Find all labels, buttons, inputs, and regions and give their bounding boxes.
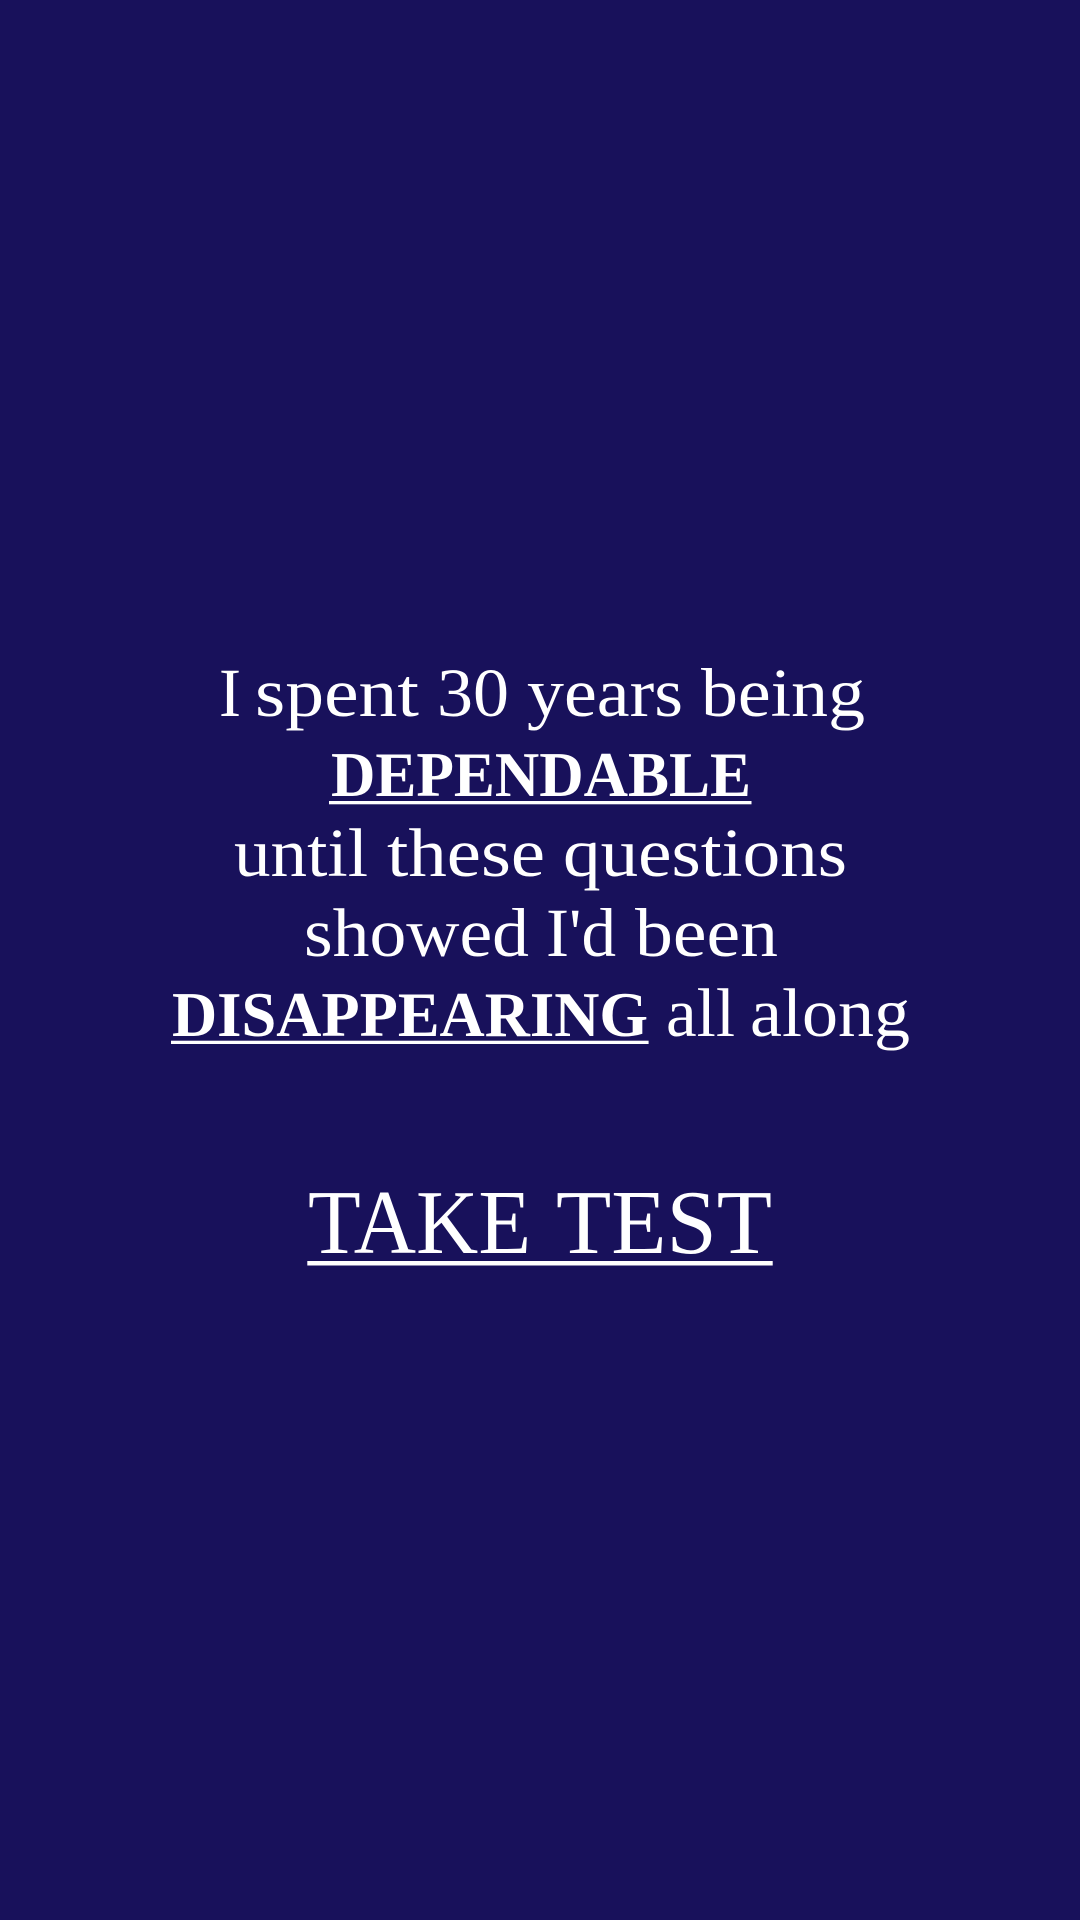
line: I spent 30 years being: spent	[255, 655, 419, 731]
headline text block	[171, 655, 910, 1051]
line: until these questions	[234, 815, 847, 891]
line: showed I'd been: showed	[304, 895, 529, 971]
line: I spent 30 years being	[219, 655, 865, 731]
line: all along	[666, 975, 910, 1051]
line: showed I'd been: I'd	[546, 895, 616, 971]
line: until these questions: questions	[563, 815, 847, 891]
line: until these questions: these	[387, 815, 545, 891]
line: I spent 30 years being: being	[701, 655, 865, 731]
emphasised word: DISAPPEARING: DISAPPEARING	[172, 979, 648, 1050]
line: all along: all	[666, 975, 735, 1051]
call to action: TAKE TEST: TAKE	[308, 1172, 531, 1273]
line: until these questions: until	[234, 815, 368, 891]
line: I spent 30 years being: 30	[437, 655, 509, 731]
line: I spent 30 years being: I	[219, 655, 241, 731]
emphasised word: DEPENDABLE: DEPENDABLE	[331, 739, 751, 810]
call to action: TAKE TEST: TEST	[556, 1172, 772, 1273]
line: I spent 30 years being: years	[527, 655, 683, 731]
line: showed I'd been: been	[635, 895, 778, 971]
line: showed I'd been	[304, 895, 778, 971]
line: all along: along	[750, 975, 910, 1051]
call to action: TAKE TEST	[307, 1172, 773, 1273]
